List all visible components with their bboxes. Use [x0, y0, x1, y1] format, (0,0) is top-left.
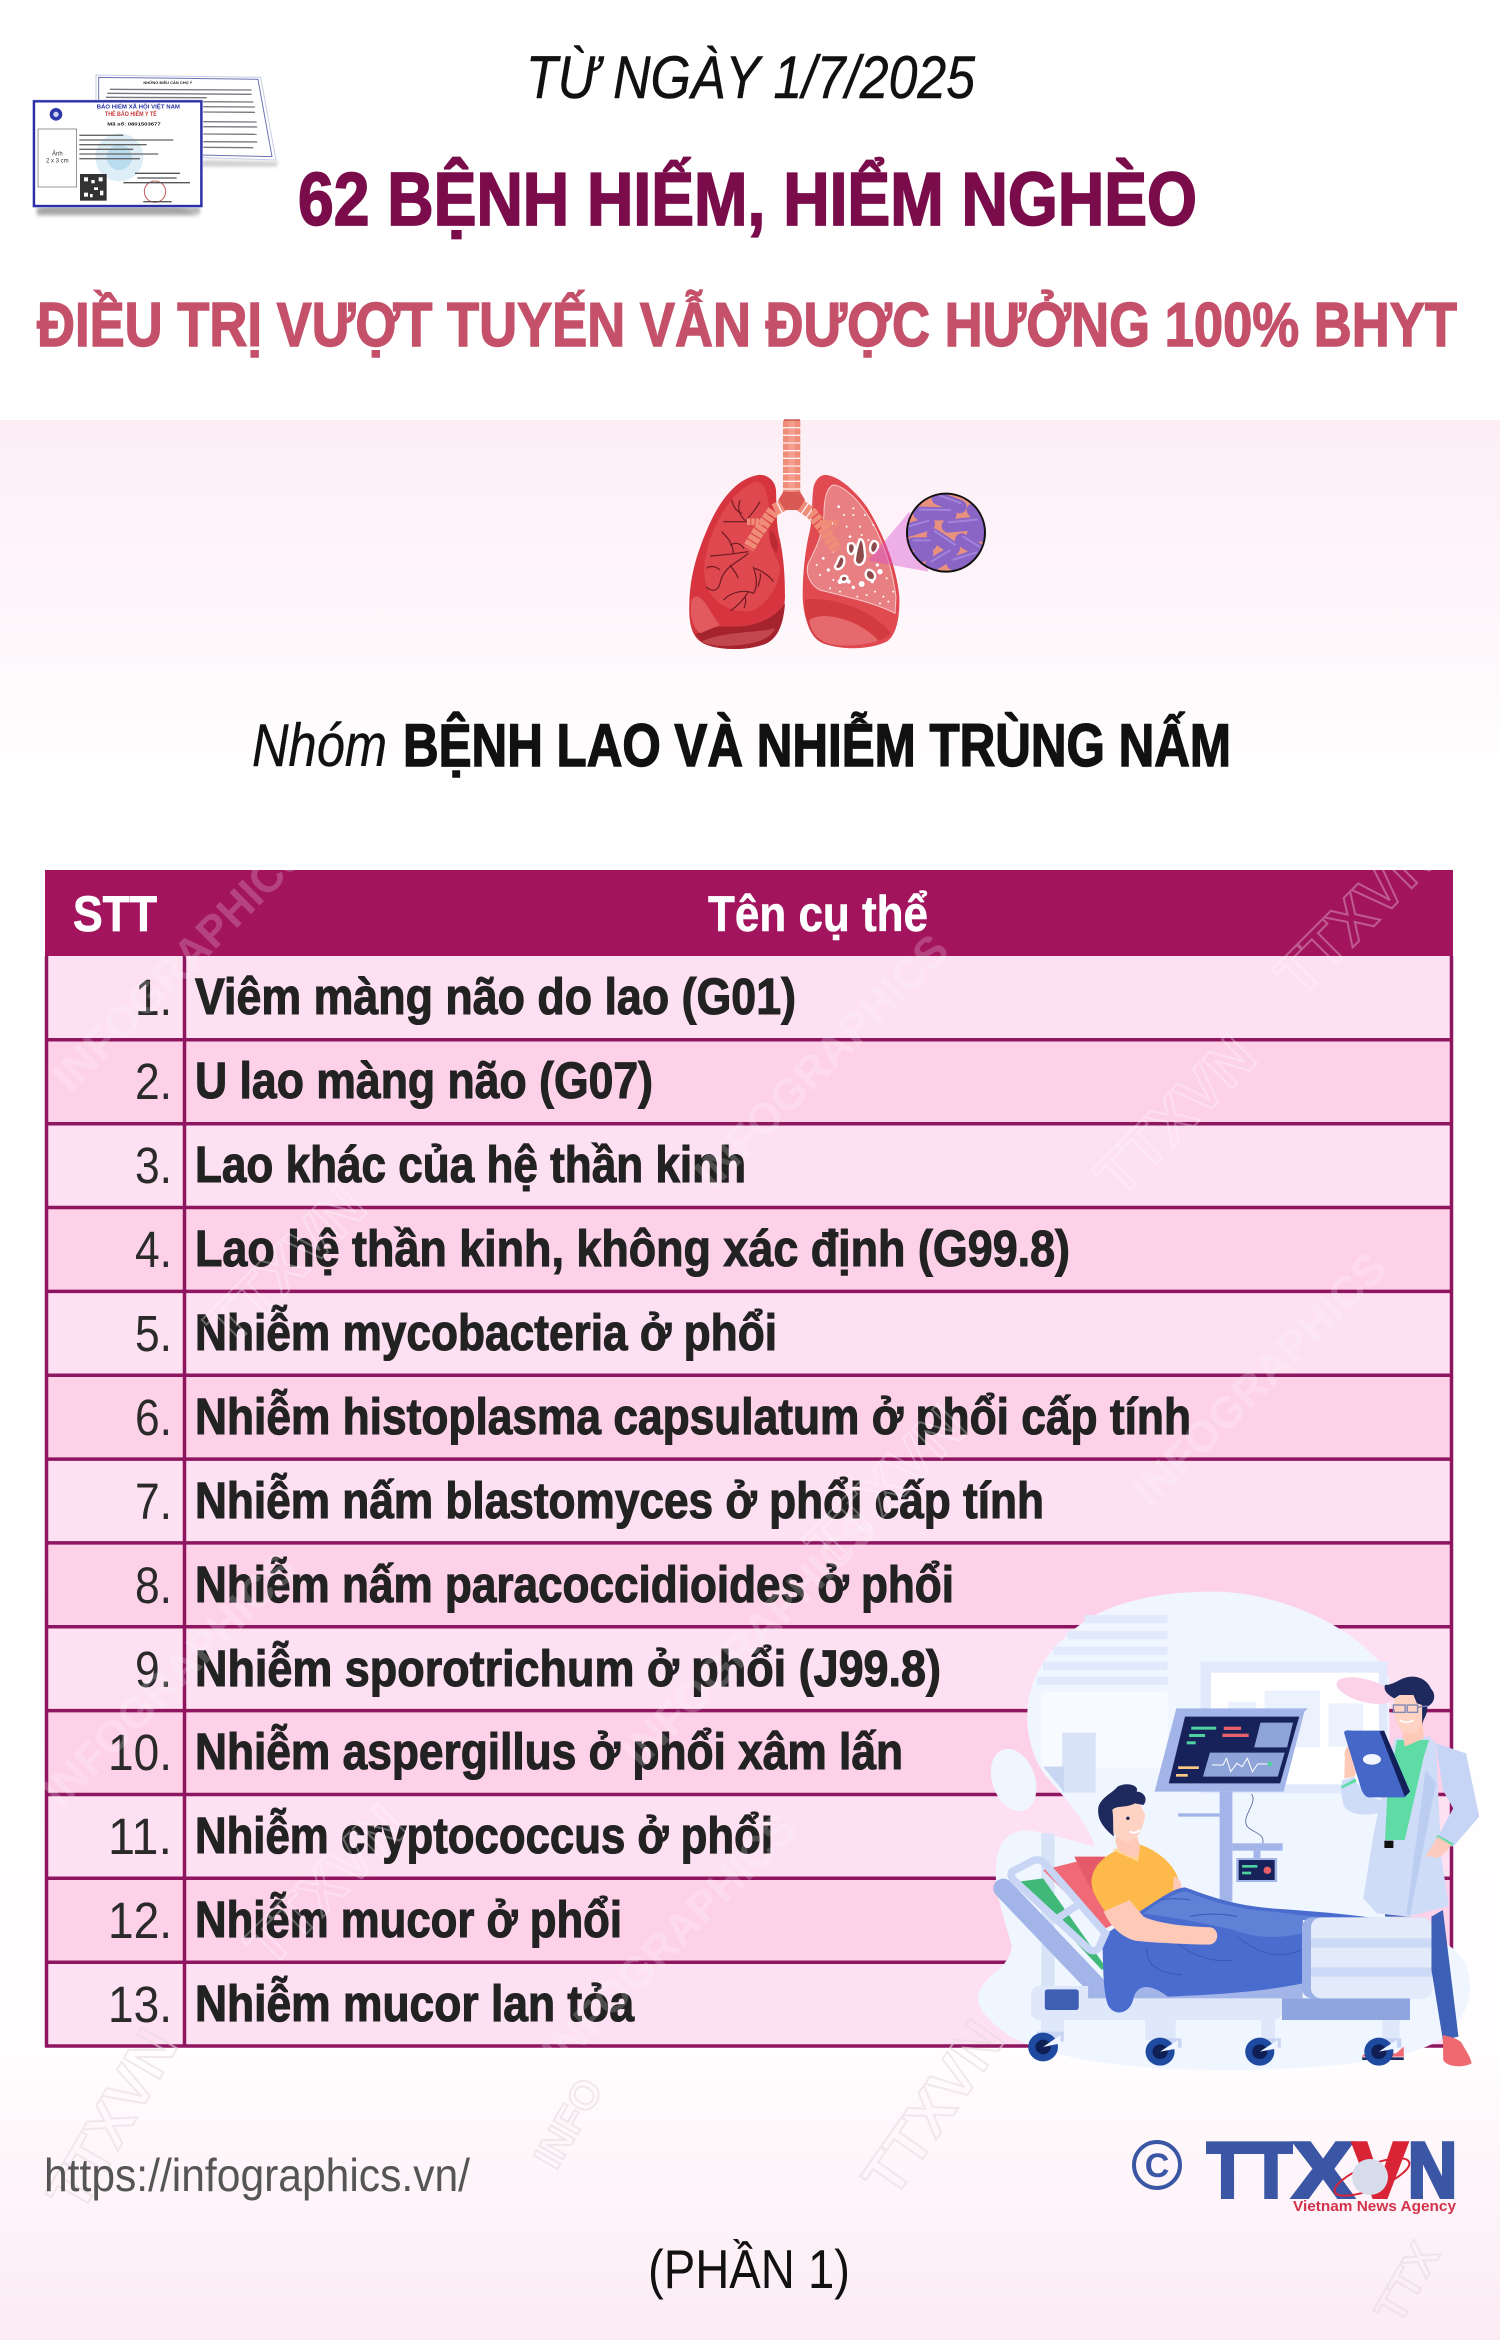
trachea and bronchi	[747, 419, 838, 550]
logo: TTXVN	[1207, 2126, 1457, 2215]
logo: TTXVN: V	[1353, 2126, 1407, 2214]
back of card: NHỮNG ĐIỀU CẦN CHÚ Ý	[143, 80, 193, 85]
bed wheels	[1028, 2020, 1401, 2066]
table row numbers: 3.	[135, 1137, 172, 1194]
heading: 62 diseases: 62 BỆNH HIẾM, HIỂM NGHÈO	[298, 157, 1197, 241]
group heading: BỆNH LAO VÀ NHIỄM TRÙNG NẤM	[403, 712, 1231, 779]
logo: copyright mark: C	[1145, 2147, 1169, 2185]
table: disease list	[45, 870, 1453, 2047]
table row numbers	[108, 969, 172, 2033]
patient arm	[1104, 1900, 1217, 1945]
front of card: THẺ BẢO HIỂM Y TẾ	[105, 111, 157, 118]
footer url: https://infographics.vn/	[44, 2149, 470, 2201]
table row names: Nhiễm mucor ở phổi	[195, 1891, 622, 1948]
left lung	[689, 475, 785, 649]
table row names: Nhiễm nấm paracoccidioides ở phổi	[195, 1556, 954, 1613]
back of card	[96, 75, 276, 160]
table row names: Nhiễm histoplasma capsulatum ở phổi cấp tính	[195, 1388, 1191, 1445]
table row names: Nhiễm aspergillus ở phổi xâm lấn	[195, 1723, 903, 1780]
front of card: Ảnh	[52, 150, 63, 157]
watermarks: INFOGRAPHICS	[533, 1803, 806, 2076]
watermarks: TTXVN	[792, 1392, 979, 1579]
monitor	[1155, 1708, 1308, 1792]
watermarks: INFOGRAPHICS	[43, 828, 316, 1101]
table row names: Nhiễm mycobacteria ở phổi	[195, 1304, 777, 1361]
table header: STT	[73, 886, 157, 942]
table row numbers: 13.	[108, 1976, 172, 2033]
table row backgrounds	[45, 956, 1453, 2047]
bed footboard	[1302, 1917, 1432, 1998]
watermarks: INFOGRAPHICS	[1123, 1243, 1396, 1516]
watermarks	[33, 822, 1449, 2331]
table row names: Lao hệ thần kinh, không xác định (G99.8)	[195, 1220, 1070, 1277]
table row numbers: 6.	[135, 1389, 172, 1446]
watermarks: INFOGRAPHICS	[33, 1543, 306, 1816]
front of card: 2 x 3 cm	[46, 159, 69, 165]
table row names: Nhiễm mucor lan tỏa	[195, 1975, 635, 2032]
front of card: BẢO HIỂM XÃ HỘI VIỆT NAM	[97, 103, 181, 111]
table row names: Nhiễm cryptococcus ở phổi	[195, 1807, 773, 1864]
watermarks: TTXVN	[232, 1792, 419, 1979]
hospital bed	[1003, 1857, 1410, 2020]
watermarks: TTX	[1365, 2235, 1449, 2331]
table row names: Lao khác của hệ thần kinh	[195, 1136, 746, 1193]
magnified bacteria	[907, 494, 987, 572]
table row names: U lao màng não (G07)	[195, 1052, 653, 1109]
table row numbers: 12.	[108, 1892, 172, 1949]
illustration: doctor and patient in hospital	[978, 1592, 1479, 2070]
icon: lungs with tuberculosis	[689, 419, 987, 649]
table row numbers: 5.	[135, 1305, 172, 1362]
blanket	[1102, 1887, 1368, 2012]
watermarks: TTXVN	[849, 2008, 1017, 2208]
table row numbers: 4.	[135, 1221, 172, 1278]
back window	[1201, 1662, 1397, 1793]
front of card	[33, 100, 203, 207]
table row names	[195, 968, 1191, 2032]
front of card: Mã số: 0801503677	[107, 121, 161, 128]
table row numbers: 8.	[135, 1557, 172, 1614]
group heading: Nhóm	[252, 712, 387, 779]
icon: health insurance cards	[33, 75, 278, 217]
table row numbers: 10.	[108, 1724, 172, 1781]
watermarks: TTXVN	[1082, 1022, 1269, 1209]
magnifier beam	[868, 512, 928, 572]
table row numbers: 2.	[135, 1053, 172, 1110]
room background blob	[978, 1592, 1470, 2070]
table row numbers: 1.	[135, 969, 172, 1026]
table header: Tên cụ thể	[708, 886, 928, 942]
watermarks: TTXVN	[192, 1172, 379, 1359]
table row names: Nhiễm sporotrichum ở phổi (J99.8)	[195, 1640, 941, 1697]
watermarks: INFOGRAPHICS	[685, 925, 958, 1198]
bed rail	[1011, 1860, 1105, 1951]
doctor	[1341, 1677, 1479, 2066]
watermarks: TTXVN	[34, 2018, 190, 2222]
logo: copyright mark	[1134, 2142, 1180, 2188]
title: date line: TỪ NGÀY 1/7/2025	[526, 44, 976, 111]
watermarks: TTXVN	[1262, 822, 1449, 1009]
table row numbers: 11.	[108, 1808, 172, 1865]
table row numbers: 9.	[135, 1641, 172, 1698]
logo: TTXVN: N	[1408, 2126, 1457, 2214]
watermarks: INFOGRAPHICS	[613, 1503, 886, 1776]
table row numbers: 7.	[135, 1473, 172, 1530]
logo: TTXVN: T	[1207, 2126, 1248, 2214]
monitor stand	[1178, 1792, 1283, 1902]
right lung	[803, 475, 899, 648]
table row names: Viêm màng não do lao (G01)	[195, 968, 796, 1025]
table row names: Nhiễm nấm blastomyces ở phổi cấp tính	[195, 1472, 1044, 1529]
watermarks: INFO	[526, 2071, 612, 2176]
logo: TTXVN: X	[1293, 2126, 1353, 2214]
window with blinds	[1037, 1615, 1168, 2047]
logo: TTXVN: Vietnam News Agency	[1293, 2198, 1457, 2215]
table header	[45, 870, 1453, 956]
logo: TTXVN: T	[1250, 2126, 1292, 2214]
part label: (PHẦN 1)	[648, 2238, 850, 2300]
patient	[1091, 1784, 1182, 1917]
